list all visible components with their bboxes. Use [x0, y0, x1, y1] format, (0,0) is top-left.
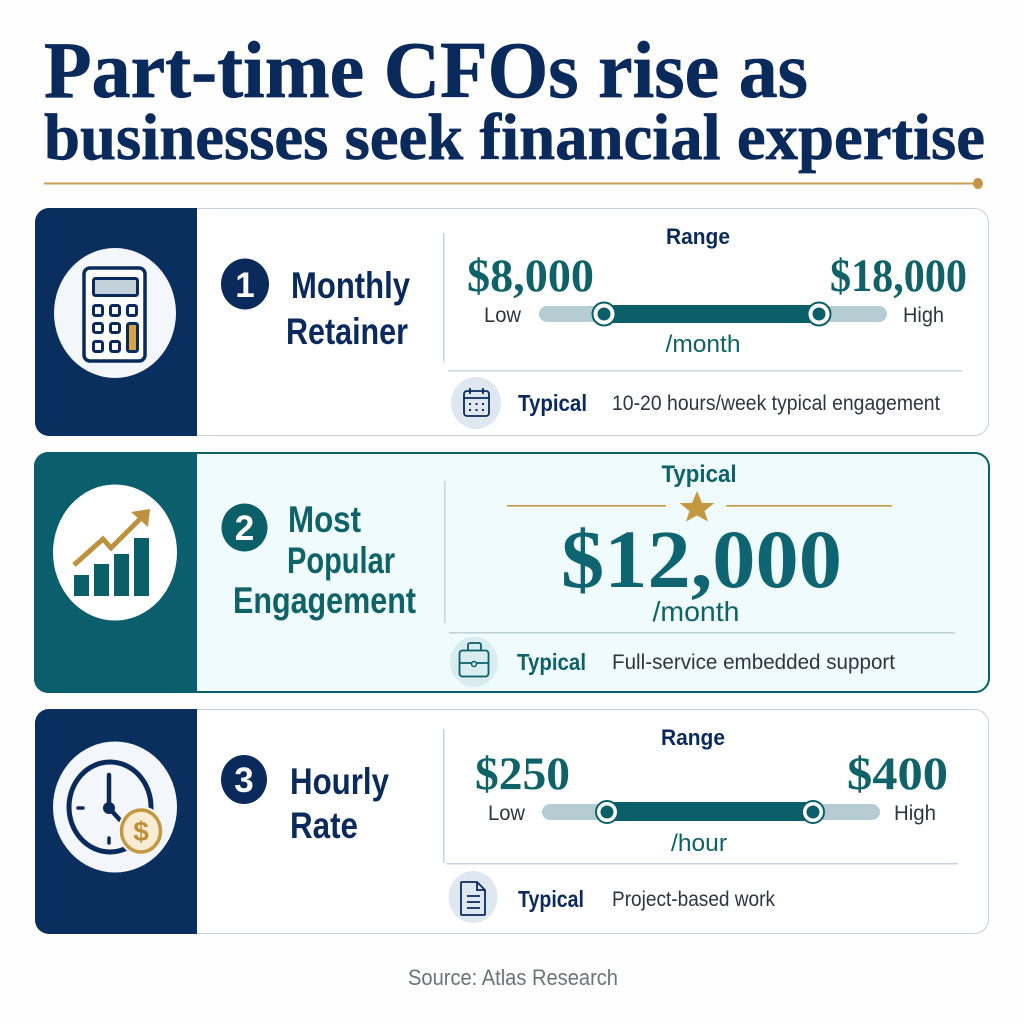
featured value: typical — [507, 461, 892, 627]
range chart: hourly: $400 — [847, 748, 948, 800]
number badge 1: 1 — [235, 266, 255, 305]
number badge 2: 2 — [235, 509, 254, 548]
heading: hourly rate: Hourly — [290, 761, 389, 802]
icon: star — [680, 491, 714, 522]
range chart: monthly: High — [903, 304, 944, 327]
number badge 3: 3 — [234, 761, 254, 800]
range chart: monthly: /month — [666, 331, 740, 358]
range chart: hourly: Low — [488, 802, 526, 825]
title: businesses seek financial expertise — [44, 101, 985, 174]
icon: document — [448, 871, 498, 923]
panel: most popular engagement — [34, 452, 989, 693]
icon panel: navy sidebar — [35, 208, 197, 436]
number badge 3 — [221, 755, 267, 804]
heading: most popular engagement: Popular — [287, 540, 395, 581]
icon panel: navy sidebar — [35, 709, 197, 934]
range chart: monthly: Range — [666, 224, 730, 249]
icon: growth chart — [53, 484, 177, 620]
typical note: monthly: Typical — [518, 390, 587, 416]
range chart: monthly: $18,000 — [830, 250, 967, 302]
number badge 1 — [221, 258, 269, 310]
range chart: hourly — [475, 725, 948, 857]
typical note: monthly — [518, 390, 940, 416]
typical note: popular — [517, 649, 895, 675]
heading: monthly retainer — [286, 265, 410, 352]
heading: hourly rate — [290, 761, 389, 846]
icon: calendar — [451, 377, 501, 429]
range chart: monthly: Low — [484, 304, 522, 327]
panel: hourly rate — [35, 709, 988, 934]
panel: monthly retainer — [35, 208, 988, 436]
heading: most popular engagement — [233, 499, 416, 621]
typical note: hourly — [518, 886, 775, 912]
typical note: hourly: Typical — [518, 886, 584, 912]
icon: clock with coin — [53, 742, 177, 872]
range chart: hourly: $250 — [475, 748, 570, 800]
featured value: typical: $12,000 — [561, 513, 842, 605]
typical note: popular: Full-service embedded support — [612, 651, 895, 674]
range chart: hourly: High — [894, 802, 936, 825]
title rule — [44, 178, 983, 189]
range chart: monthly: $8,000 — [467, 250, 594, 302]
icon: briefcase — [450, 637, 498, 687]
typical note: popular: Typical — [517, 649, 586, 675]
title — [44, 25, 985, 174]
typical note: monthly: 10-20 hours/week typical engagement — [612, 392, 940, 415]
heading: hourly rate: Rate — [290, 805, 358, 846]
icon: calculator — [54, 248, 176, 378]
icon panel: teal sidebar — [34, 452, 197, 693]
typical note: hourly: Project-based work — [612, 888, 775, 911]
range chart: hourly: Range — [661, 725, 725, 750]
source line: Source: Atlas Research — [408, 965, 618, 990]
range chart: hourly: /hour — [671, 830, 727, 857]
heading: monthly retainer: Retainer — [286, 311, 408, 352]
range chart: monthly — [467, 224, 967, 358]
heading: most popular engagement: Most — [288, 499, 361, 540]
featured value: typical: Typical — [662, 461, 736, 488]
featured value: typical: /month — [652, 596, 740, 627]
icon: clock with coin: $ — [133, 816, 149, 847]
title: Part-time CFOs rise as — [44, 25, 808, 115]
heading: monthly retainer: Monthly — [291, 265, 410, 306]
heading: most popular engagement: Engagement — [233, 580, 416, 621]
number badge 2 — [222, 504, 268, 552]
